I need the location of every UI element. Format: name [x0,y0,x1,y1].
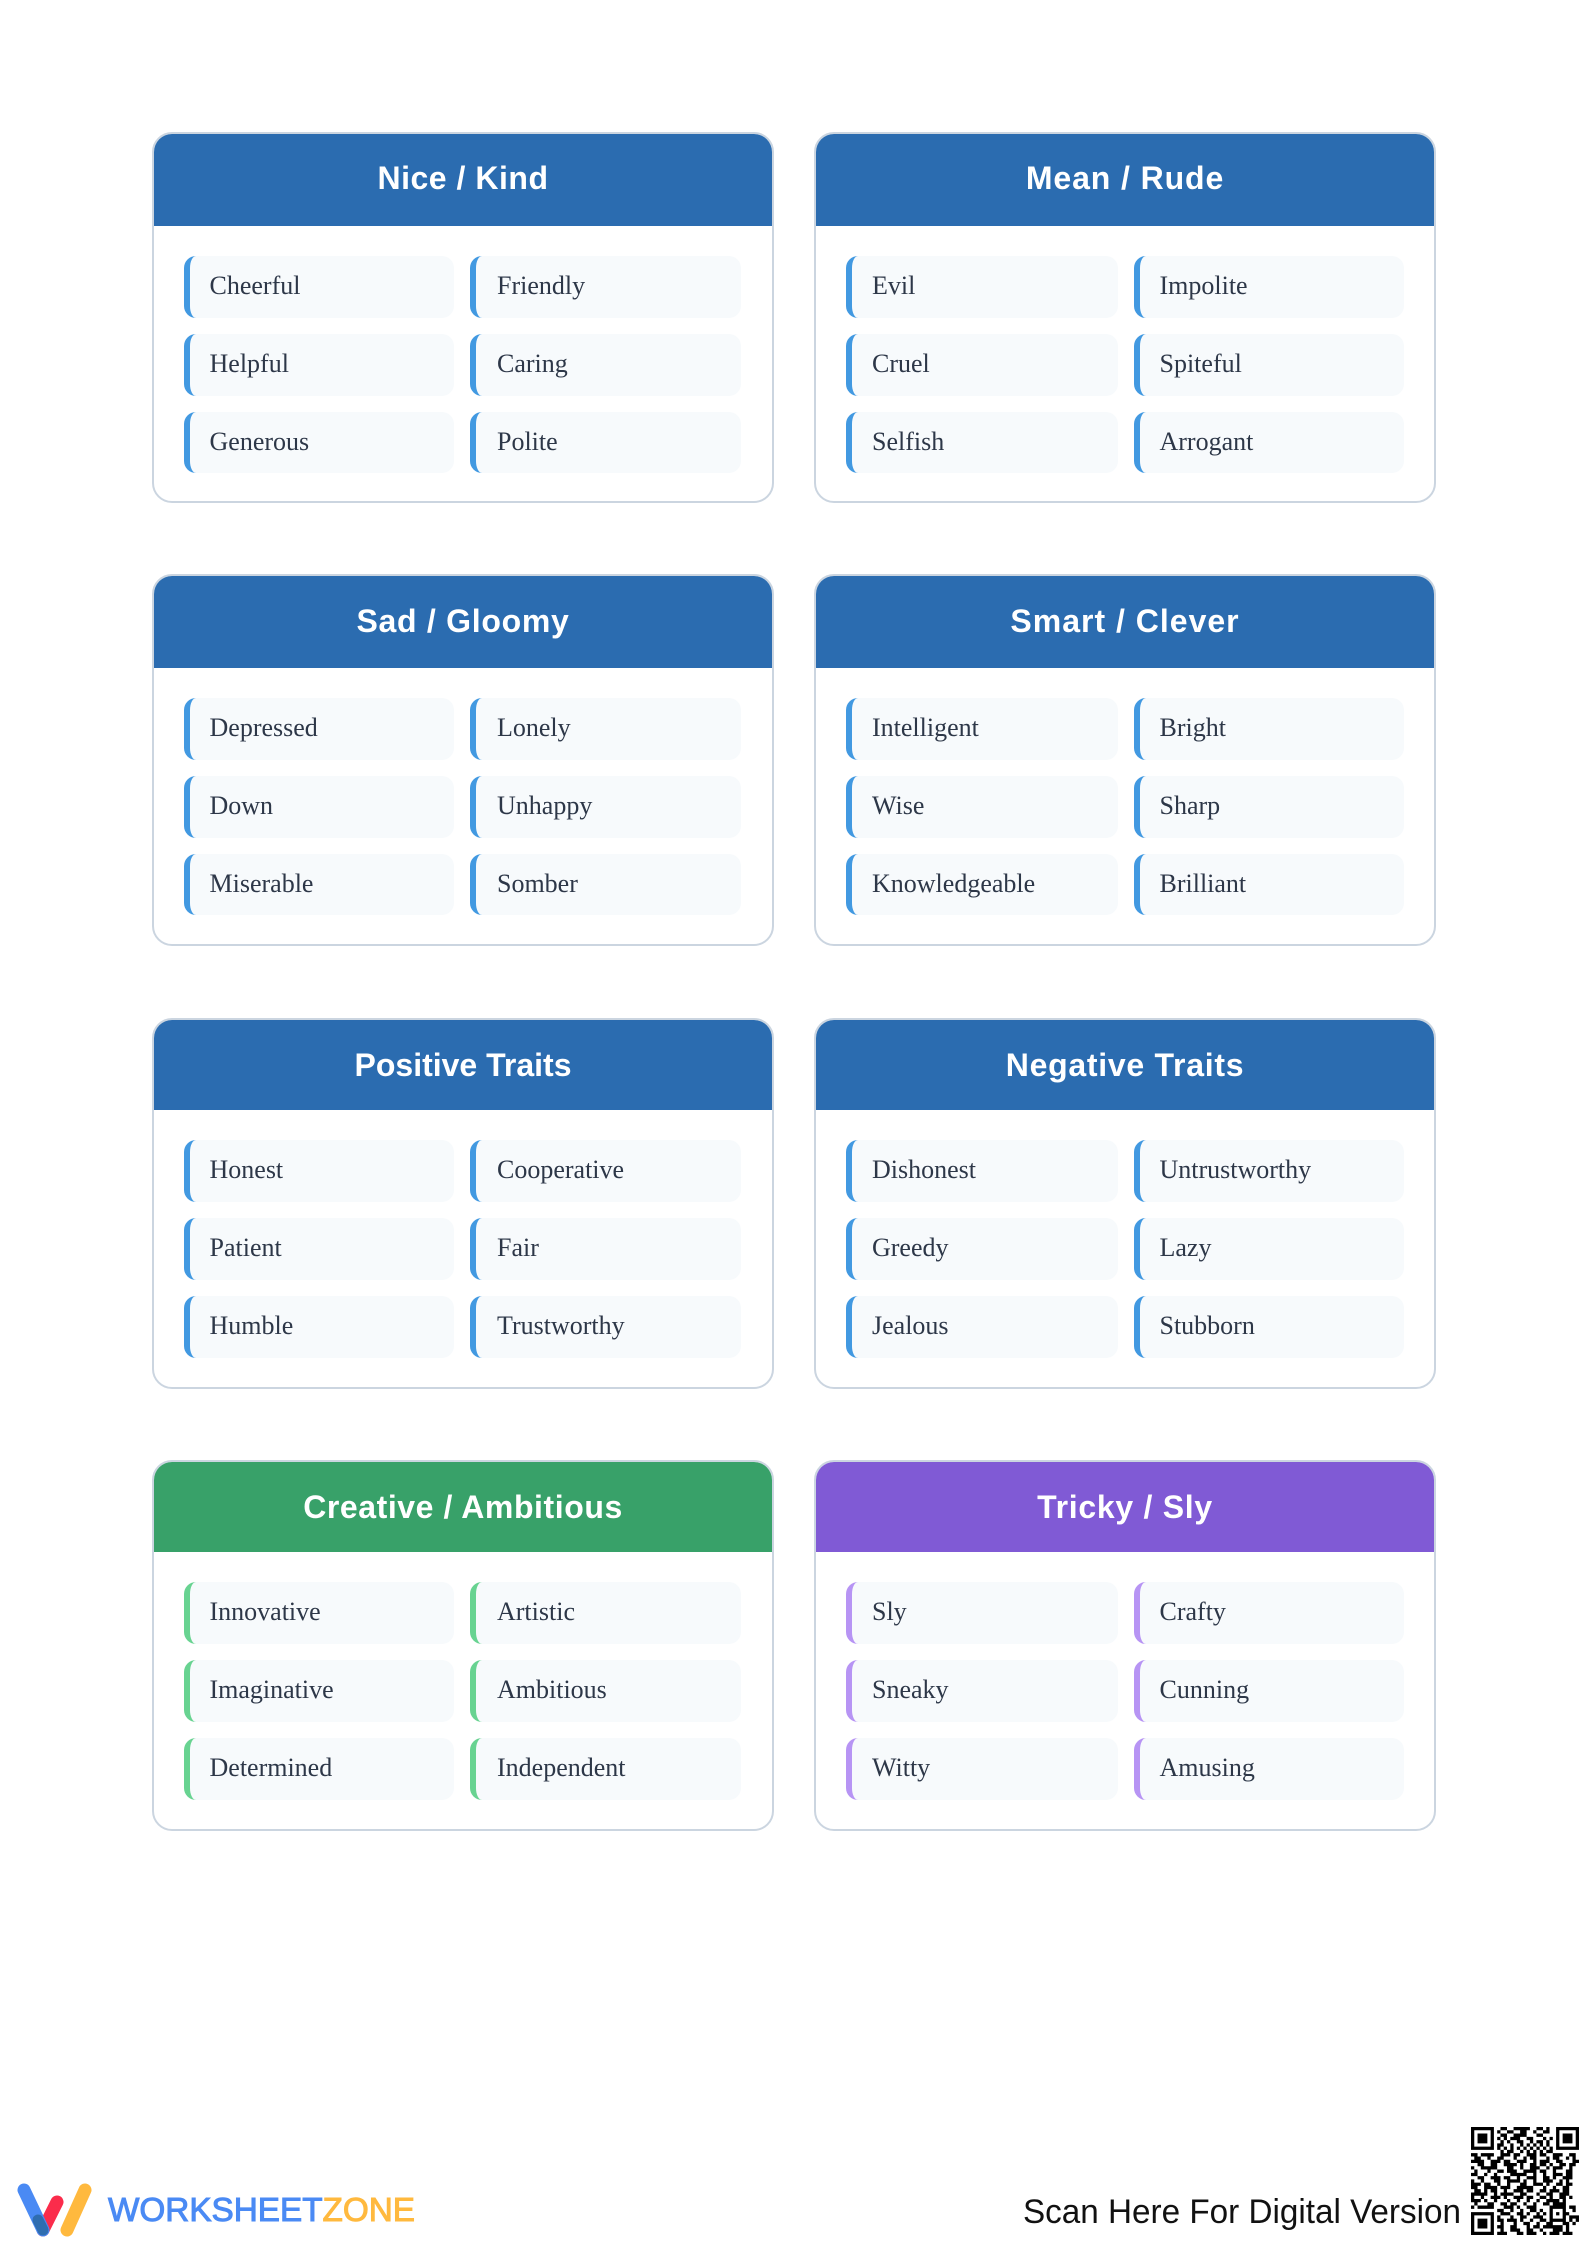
word: Lazy [1134,1218,1404,1280]
word: Honest: Honest [210,1155,283,1184]
heading: Sad / Gloomy: Sad / Gloomy [356,603,570,639]
panel: Negative Traits [814,1018,1436,1389]
word: Arrogant: Arrogant [1160,427,1253,456]
word: Down: Down [210,791,273,820]
word: Dishonest: Dishonest [872,1155,976,1184]
word: Cooperative [470,1140,741,1202]
word: Impolite: Impolite [1160,271,1248,300]
word: Lonely: Lonely [497,713,571,742]
word: Somber: Somber [497,869,578,898]
heading: Sad / Gloomy [154,576,772,668]
heading: Negative Traits [816,1020,1434,1110]
word: Humble [184,1296,454,1358]
word: Dishonest [846,1140,1118,1202]
heading: Nice / Kind: Nice / Kind [377,160,549,196]
word: Friendly: Friendly [497,271,585,300]
word: Untrustworthy: Untrustworthy [1160,1155,1311,1184]
word: Cooperative: Cooperative [497,1155,624,1184]
word: Lonely [470,698,741,760]
word: Polite: Polite [497,427,558,456]
word: Cruel: Cruel [872,349,930,378]
word: Evil [846,256,1118,318]
heading: Positive Traits [154,1020,772,1110]
word: Untrustworthy [1134,1140,1404,1202]
word: Independent: Independent [497,1753,626,1782]
word: Sneaky [846,1660,1118,1722]
word: Cunning: Cunning [1160,1675,1249,1704]
word: Generous [184,412,454,473]
word: Witty [846,1738,1118,1800]
word: Witty: Witty [872,1753,930,1782]
heading: Smart / Clever: Smart / Clever [1010,603,1240,639]
word: Wise: Wise [872,791,924,820]
footer [18,2127,1579,2236]
panel: Nice / Kind [152,132,774,503]
word: Cruel [846,334,1118,396]
word: Imaginative [184,1660,454,1722]
word: Imaginative: Imaginative [210,1675,334,1704]
word: Crafty: Crafty [1160,1597,1226,1626]
word: Knowledgeable [846,854,1118,915]
word: Patient: Patient [210,1233,282,1262]
word: Artistic [470,1582,741,1644]
word: Cunning [1134,1660,1404,1722]
word: Amusing [1134,1738,1404,1800]
word: Brilliant [1134,854,1404,915]
panel: Smart / Clever [814,574,1436,946]
heading: Mean / Rude: Mean / Rude [1026,160,1224,196]
heading: Tricky / Sly [816,1462,1434,1552]
word: Unhappy: Unhappy [497,791,592,820]
word: Bright [1134,698,1404,760]
word: Cheerful [184,256,454,318]
heading: Positive Traits: Positive Traits [354,1047,571,1083]
word: Helpful [184,334,454,396]
word: Intelligent [846,698,1118,760]
word: Fair: Fair [497,1233,539,1262]
icon: Worksheetzone logo [24,2190,85,2230]
panel: Tricky / Sly [814,1460,1436,1831]
word: Down [184,776,454,838]
word: Generous: Generous [210,427,309,456]
word: Crafty [1134,1582,1404,1644]
word: Stubborn [1134,1296,1404,1358]
word: Knowledgeable: Knowledgeable [872,869,1035,898]
word list: Nice / Kind [184,256,586,473]
word: Trustworthy [470,1296,741,1358]
heading: Negative Traits: Negative Traits [1006,1047,1244,1083]
heading: Tricky / Sly: Tricky / Sly [1037,1489,1213,1525]
word: Ambitious: Ambitious [497,1675,607,1704]
word: Jealous: Jealous [872,1311,949,1340]
word: Determined: Determined [210,1753,332,1782]
panel: Mean / Rude [814,132,1436,503]
word: Somber [470,854,741,915]
word: Sneaky: Sneaky [872,1675,949,1704]
word: Evil: Evil [872,271,915,300]
panel: Sad / Gloomy [152,574,774,946]
word: Sharp [1134,776,1404,838]
word list: Tricky / Sly [846,1582,1255,1800]
word: Sharp: Sharp [1160,791,1220,820]
heading: Nice / Kind [154,134,772,226]
word: Lazy: Lazy [1160,1233,1211,1262]
word: Honest [184,1140,454,1202]
word: Innovative [184,1582,454,1644]
word: Brilliant: Brilliant [1160,869,1246,898]
word: Determined [184,1738,454,1800]
word: Depressed [184,698,454,760]
word: Artistic: Artistic [497,1597,575,1626]
word: Cheerful: Cheerful [210,271,300,300]
word list: Positive Traits [184,1140,625,1358]
word list: Smart / Clever [846,698,1246,915]
heading: Mean / Rude [816,134,1434,226]
word: Greedy [846,1218,1118,1280]
word: Stubborn: Stubborn [1160,1311,1255,1340]
word: Bright: Bright [1160,713,1226,742]
heading: Smart / Clever [816,576,1434,668]
word: Spiteful: Spiteful [1160,349,1242,378]
word list: Negative Traits [846,1140,1312,1358]
word: Selfish: Selfish [872,427,944,456]
word: Helpful: Helpful [210,349,289,378]
word: Sly: Sly [872,1597,907,1626]
word: Spiteful [1134,334,1404,396]
word: Unhappy [470,776,741,838]
word: Jealous [846,1296,1118,1358]
word list: Creative / Ambitious [184,1582,626,1800]
word: Miserable [184,854,454,915]
word: Patient [184,1218,454,1280]
word: Ambitious [470,1660,741,1722]
word: Caring: Caring [497,349,568,378]
word: Selfish [846,412,1118,473]
word: Wise [846,776,1118,838]
word: Fair [470,1218,741,1280]
word list: Mean / Rude [846,256,1254,473]
QR code [1471,2127,1579,2235]
heading: Creative / Ambitious: Creative / Ambitious [303,1489,623,1525]
heading: Creative / Ambitious [154,1462,772,1552]
logo wordmark: WORKSHEETZONE [108,2191,415,2228]
word: Intelligent: Intelligent [872,713,979,742]
word: Miserable: Miserable [210,869,313,898]
panel: Creative / Ambitious [152,1460,774,1831]
word: Polite [470,412,741,473]
panel: Positive Traits [152,1018,774,1389]
word: Greedy: Greedy [872,1233,949,1262]
word: Independent [470,1738,741,1800]
word: Friendly [470,256,741,318]
word: Amusing: Amusing [1160,1753,1255,1782]
word: Sly [846,1582,1118,1644]
word: Arrogant [1134,412,1404,473]
word: Depressed: Depressed [210,713,318,742]
word: Caring [470,334,741,396]
word: Impolite [1134,256,1404,318]
word list: Sad / Gloomy [184,698,592,915]
scan caption: Scan Here For Digital Version [1023,2193,1461,2231]
word: Trustworthy: Trustworthy [497,1311,625,1340]
word: Humble: Humble [210,1311,293,1340]
word: Innovative: Innovative [210,1597,321,1626]
